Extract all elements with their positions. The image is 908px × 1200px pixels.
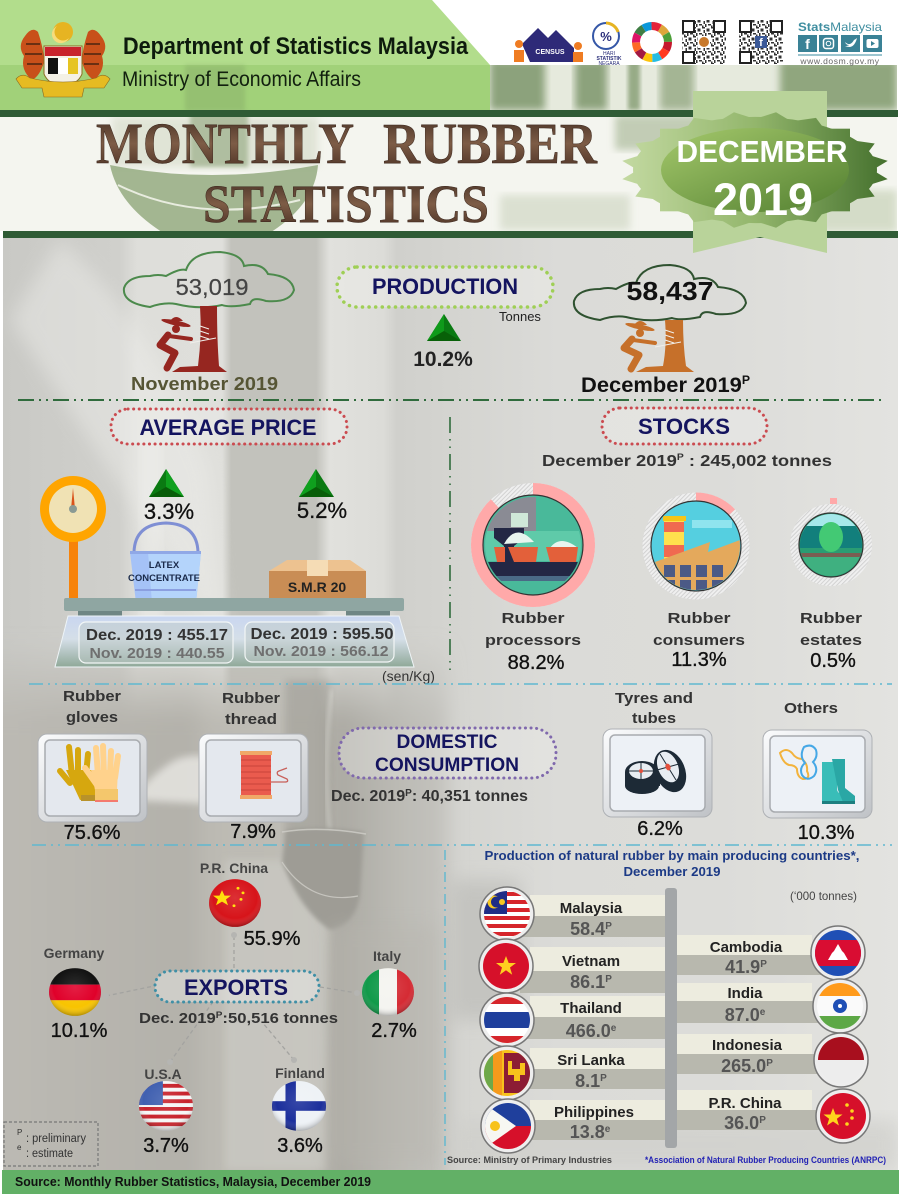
card: rubber gloves: 75.6%: [64, 822, 121, 844]
icon: bands and boots: [780, 746, 855, 804]
smr change: 5.2%: [297, 498, 347, 523]
logo: StatsMalaysia social: f: [805, 36, 810, 52]
row: cambodia: [677, 926, 865, 980]
card: rubber thread: Rubber: [222, 690, 280, 707]
december label: P: [742, 373, 750, 387]
production change: 10.2%: [413, 348, 473, 371]
export: germany: 10.1%: [51, 1020, 108, 1042]
center bar: [665, 888, 677, 1148]
exports pill: [155, 971, 319, 1002]
footer source bar: [2, 1170, 899, 1194]
heading: ministry: Ministry of Economic Affairs: [122, 68, 361, 91]
connector lines: [103, 932, 360, 1065]
row: sri lanka: P: [600, 1073, 607, 1084]
legend: preliminary and estimate: : estimate: [26, 1148, 73, 1160]
card: others: 10.3%: [798, 822, 855, 844]
row: thailand: 466.0: [566, 1021, 611, 1041]
logo: statistik negara: HARI: [603, 51, 615, 57]
heading: department: Department of Statistics Malaysia: [123, 33, 469, 60]
row: vietnam: Vietnam: [562, 953, 620, 970]
date text: DECEMBER: [676, 134, 848, 169]
light patch: [148, 752, 198, 807]
row: pr china: [677, 1089, 870, 1143]
december cloud: 58,437: [626, 276, 714, 306]
up arrow smr: [299, 469, 334, 497]
card: rubber gloves: Rubber: [63, 688, 121, 705]
export: italy: [362, 948, 417, 1042]
icon: gloves: [60, 746, 118, 802]
title: MONTHLY: [96, 111, 354, 176]
panel: production: [124, 252, 750, 397]
export: finland: [272, 1065, 326, 1157]
november cloud: [124, 252, 294, 307]
latex prices: [79, 622, 233, 663]
row: india: e: [760, 1007, 766, 1018]
icon: tapper december: [624, 320, 694, 372]
label: estates: 0.5%: [810, 650, 856, 672]
row: pr china: P.R. China: [708, 1095, 782, 1112]
row: sri lanka: [480, 1046, 665, 1100]
exports total: :50,516 tonnes: [222, 1010, 338, 1027]
label: consumers: [653, 610, 745, 671]
row: india: India: [727, 985, 763, 1002]
tonnes unit: Tonnes: [499, 309, 541, 324]
december label: December 2019: [581, 373, 739, 397]
QR code: website: [682, 20, 726, 64]
export: italy: 2.7%: [371, 1020, 417, 1042]
logo: StatsMalaysia social: [798, 20, 882, 66]
logo: statistik negara: NEGARA: [598, 61, 620, 67]
collecting cup: [282, 828, 364, 930]
export: italy: Italy: [373, 948, 401, 964]
logo: statistik negara: STATISTIK: [596, 56, 622, 62]
icon: rubber processors ring: [477, 489, 589, 601]
export: china: [200, 860, 301, 950]
label: estates: Rubber: [800, 610, 862, 627]
card: tyres and tubes: 6.2%: [637, 818, 683, 840]
title photo strip: [0, 117, 897, 231]
smr prices: [245, 622, 394, 662]
logo: census: [514, 28, 583, 62]
QR code: facebook: [739, 20, 783, 64]
card: others: [763, 700, 872, 844]
row: indonesia: 265.0: [721, 1056, 766, 1076]
export: china: P.R. China: [200, 860, 268, 876]
label: estates: estates: [800, 632, 862, 649]
panel: stocks: [477, 408, 868, 674]
scale plate: [55, 598, 414, 667]
row: indonesia: [677, 1033, 868, 1087]
up arrow latex: [149, 469, 184, 497]
row: malaysia: 58.4: [570, 919, 605, 939]
row: thailand: [480, 993, 665, 1047]
logo: StatsMalaysia social: StatsMalaysia: [798, 20, 882, 34]
export: finland: Finland: [275, 1065, 325, 1081]
latex change: 3.3%: [144, 499, 194, 524]
row: vietnam: [479, 939, 665, 993]
legend: preliminary and estimate: : preliminary: [26, 1133, 86, 1145]
page background photo: [3, 238, 898, 1170]
logo: StatsMalaysia social: www.dosm.gov.my: [799, 56, 880, 66]
chart heading: December 2019: [624, 864, 720, 879]
logo: SDG wheel: [636, 26, 668, 58]
export: finland: 3.6%: [277, 1135, 323, 1157]
export: usa: [139, 1066, 193, 1157]
icon: SMR box: [269, 560, 366, 601]
title: RUBBER: [383, 111, 598, 176]
legend: preliminary and estimate: P: [17, 1128, 22, 1137]
row: vietnam: P: [605, 974, 612, 985]
title: [96, 111, 598, 234]
label: processors: processors: [485, 632, 581, 649]
unit: (sen/Kg): [382, 668, 435, 684]
production pill: PRODUCTION: [372, 274, 518, 299]
icon: scale gauge: [40, 476, 106, 598]
export: china: 55.9%: [244, 928, 301, 950]
row: malaysia: P: [605, 921, 612, 932]
card: rubber gloves: [38, 688, 147, 844]
partner logos: [514, 20, 882, 67]
legend: preliminary and estimate: e: [17, 1143, 22, 1152]
export: usa: 3.7%: [143, 1135, 189, 1157]
stocks total: : 245,002 tonnes: [684, 453, 832, 470]
icon: rubber estates ring: [794, 498, 868, 582]
domestic pill: CONSUMPTION: [375, 755, 519, 776]
smr prices: Nov. 2019 : 566.12: [254, 643, 388, 660]
card: tyres and tubes: tubes: [632, 710, 676, 727]
latex prices: Dec. 2019 : 455.17: [86, 627, 228, 644]
row: malaysia: Malaysia: [560, 900, 623, 917]
december cloud: [574, 265, 746, 320]
domestic total: P: [405, 788, 412, 799]
star seal: [622, 112, 888, 228]
row: sri lanka: 8.1: [575, 1071, 600, 1091]
title: STATISTICS: [203, 174, 489, 234]
row: thailand: e: [611, 1023, 617, 1034]
card: rubber gloves: gloves: [66, 709, 118, 726]
up arrow production: [427, 314, 461, 341]
source note: Source: Ministry of Primary Industries: [447, 1155, 612, 1165]
legend: preliminary and estimate: [4, 1122, 98, 1166]
card: rubber thread: 7.9%: [230, 821, 276, 843]
row: vietnam: 86.1: [570, 972, 605, 992]
november label: November 2019: [131, 374, 278, 394]
domestic total: Dec. 2019: [331, 788, 405, 805]
smr prices: Dec. 2019 : 595.50: [250, 626, 394, 643]
row: philippines: [481, 1099, 665, 1153]
exports total: Dec. 2019: [139, 1010, 208, 1027]
panel: average price: [40, 409, 435, 684]
export: germany: Germany: [44, 945, 105, 961]
card: rubber thread: [199, 690, 308, 843]
domestic pill: [339, 728, 556, 778]
unit: (‘000 tonnes): [790, 889, 857, 903]
label: processors: Rubber: [502, 610, 565, 627]
stocks pill: STOCKS: [638, 414, 730, 439]
card: tyres and tubes: [603, 690, 712, 840]
row: cambodia: Cambodia: [710, 939, 783, 956]
heading: department: [122, 33, 469, 91]
row: india: [677, 979, 867, 1033]
row: cambodia: 41.9: [725, 957, 760, 977]
label: consumers: consumers: [653, 632, 745, 649]
icon: tapper november: [160, 306, 227, 372]
production pill: [337, 267, 553, 307]
chart heading: [484, 848, 860, 879]
november cloud: 53,019: [176, 274, 248, 300]
tree trunk lower: [225, 860, 330, 1170]
domestic total: : 40,351 tonnes: [412, 788, 528, 805]
icon: spool: [240, 751, 288, 799]
row: philippines: e: [605, 1124, 611, 1135]
label: estates: [800, 610, 862, 672]
exports pill: EXPORTS: [184, 975, 288, 1000]
icon: latex bucket: CONCENTRATE: [128, 573, 200, 584]
row: philippines: Philippines: [554, 1104, 634, 1121]
label: consumers: 11.3%: [671, 649, 727, 671]
row: indonesia: P: [766, 1058, 773, 1069]
stocks pill: [602, 408, 767, 444]
row: india: 87.0: [725, 1005, 760, 1025]
row: pr china: 36.0: [724, 1113, 759, 1133]
export: usa: U.S.A: [144, 1066, 182, 1082]
latex prices: Nov. 2019 : 440.55: [90, 645, 224, 662]
exports total: P: [216, 1010, 222, 1020]
panel: production by country: [447, 848, 886, 1166]
ribbon: [693, 91, 827, 253]
icon: latex bucket: [128, 523, 201, 603]
footer source bar: Source: Monthly Rubber Statistics, Malaysia, December 2019: [15, 1175, 371, 1189]
label: consumers: Rubber: [668, 610, 731, 627]
QR code: facebook: f: [759, 37, 763, 49]
label: processors: 88.2%: [508, 652, 565, 674]
date badge: 2019: [713, 174, 813, 225]
logo: statistik negara: [593, 23, 622, 67]
panel: exports: [44, 860, 417, 1157]
lower right haze: [450, 880, 520, 1020]
row: cambodia: P: [760, 959, 767, 970]
card: tyres and tubes: Tyres and: [615, 690, 693, 707]
stocks total: P: [677, 452, 684, 462]
logo: statistik negara: %: [600, 29, 612, 44]
stocks total: December 2019: [542, 453, 659, 470]
row: sri lanka: Sri Lanka: [557, 1052, 625, 1069]
row: indonesia: Indonesia: [712, 1037, 783, 1054]
header band: [0, 0, 898, 238]
icon: coat of arms: [16, 22, 110, 97]
row: pr china: P: [759, 1115, 766, 1126]
row: thailand: Thailand: [560, 1000, 622, 1017]
average price pill: [111, 409, 347, 444]
row: malaysia: [480, 887, 665, 941]
logo: census: CENSUS: [535, 49, 565, 56]
icon: tyres: [625, 745, 692, 797]
icon: SMR box: S.M.R 20: [288, 579, 346, 595]
icon: latex bucket: LATEX: [149, 560, 180, 571]
row: philippines: 13.8: [570, 1122, 605, 1142]
date badge: [622, 91, 888, 253]
icon: rubber consumers ring: [647, 497, 745, 595]
export: germany: [44, 945, 108, 1042]
domestic pill: DOMESTIC: [396, 732, 498, 753]
panel: domestic consumption: [38, 688, 872, 844]
card: others: Others: [784, 700, 838, 717]
average price pill: AVERAGE PRICE: [140, 415, 316, 440]
chart heading: Production of natural rubber by main producing countries*,: [484, 848, 860, 863]
label: processors: [485, 610, 581, 674]
card: rubber thread: thread: [225, 711, 277, 728]
